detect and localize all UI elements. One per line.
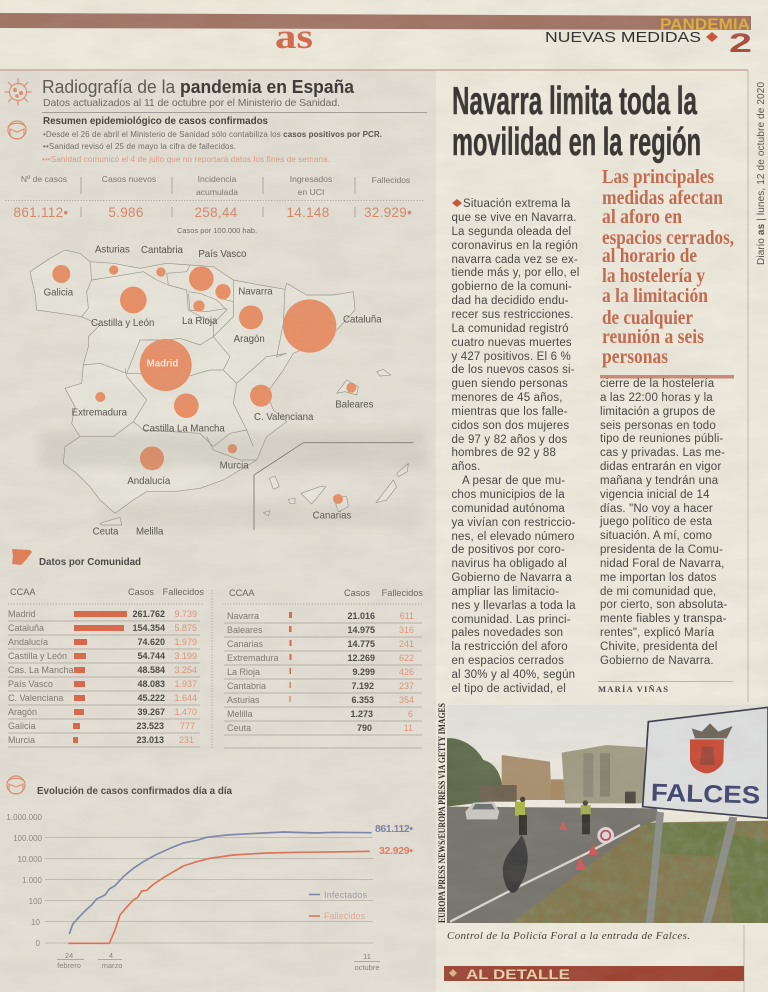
row deaths: 1.937	[174, 679, 197, 689]
heading: datos por comunidad: Datos por Comunidad	[39, 557, 141, 568]
sign text: FALCES	[651, 780, 761, 810]
row case counts: 23.013	[136, 735, 164, 745]
article column 1: y 427 positivos. El 6 %	[452, 351, 571, 363]
article column 1: tiende más y, por ello, el	[452, 267, 579, 279]
heading: evolución: Evolución de casos confirmados día a día	[37, 786, 233, 797]
ornament	[452, 199, 462, 207]
x axis dates: 24	[65, 951, 73, 960]
map: region labels: Extremadura	[72, 408, 128, 419]
row case counts: 74.620	[137, 637, 165, 647]
map of Spain	[30, 245, 413, 537]
byline: MARÍA VIÑAS	[598, 684, 668, 694]
row case counts: 48.584	[137, 665, 165, 675]
row deaths: 3.199	[174, 651, 197, 661]
row deaths: 1.979	[174, 637, 197, 647]
article column 1: menores de 45 años,	[452, 392, 563, 404]
article column 1: dad ha decidido endu-	[452, 295, 569, 307]
map: region labels: Cantabria	[141, 245, 183, 256]
row deaths: 241	[399, 639, 414, 649]
stat: ingresados en UCI: en UCI	[298, 187, 324, 197]
article column 1: que se vive en Navarra.	[452, 212, 577, 224]
stat: casos nuevos: Casos nuevos	[102, 174, 156, 184]
article column 2: cierre de la hostelería	[600, 378, 715, 390]
article column 1: años.	[452, 461, 480, 473]
map: region labels: País Vasco	[198, 249, 246, 260]
row case counts: 45.222	[137, 693, 165, 703]
subheading: deck: la hostelería y	[602, 265, 705, 287]
row names: Murcia	[8, 735, 35, 745]
row case counts: 23.523	[136, 721, 164, 731]
stat: ingresados en UCI: 14.148	[286, 205, 330, 220]
stat: incidencia acumulada: acumulada	[196, 187, 238, 197]
table: left communities	[8, 587, 212, 748]
photo road line	[450, 825, 640, 922]
row deaths: 777	[180, 721, 195, 731]
unit note: Casos por 100.000 hab.	[177, 226, 257, 235]
article column 1: nes, el elevado número	[452, 531, 575, 543]
row names: Madrid	[8, 609, 36, 619]
article column 2: limitación a grupos de	[600, 406, 715, 418]
article column 1: guen siendo personas	[452, 378, 568, 390]
row names: Melilla	[227, 709, 253, 719]
stat: nº de casos	[14, 174, 68, 220]
y axis labels: 1.000.000	[6, 813, 43, 822]
map: region labels: Aragón	[234, 334, 265, 345]
article column 1: navirus ha obligado al	[452, 558, 567, 570]
row case counts	[347, 611, 375, 733]
row deaths	[399, 611, 414, 733]
legend: Fallecidos	[324, 911, 366, 921]
stats row	[5, 174, 425, 235]
map: region labels: Navarra	[238, 286, 273, 297]
photo sky	[447, 705, 768, 740]
article column 1: el tipo de actividad, el	[452, 683, 566, 695]
photo buildings	[480, 745, 645, 803]
table: right communities	[222, 588, 423, 748]
photo shadow	[503, 835, 528, 893]
newspaper logo: as	[275, 17, 313, 56]
article column 1: comunidad autónoma	[452, 503, 565, 515]
map: Ceuta and Melilla	[100, 517, 122, 525]
line chart: cases and deaths	[6, 813, 413, 972]
sign crest	[690, 723, 733, 773]
article column 2: situación. A mí, como	[600, 530, 712, 542]
article column 2: de mi comunidad que,	[600, 586, 716, 598]
map: bubbles	[52, 265, 356, 504]
article column 1: comunidad. Las princi-	[452, 614, 571, 626]
photo road	[447, 807, 660, 924]
article column 1: gobierno de la comuni-	[452, 281, 572, 293]
diamond ornament	[706, 32, 718, 42]
map: region labels: C. Valenciana	[254, 412, 314, 423]
article column 1: mientras que los falle-	[452, 406, 568, 418]
y axis labels: 0	[36, 939, 41, 948]
row case counts: 21.016	[347, 611, 375, 621]
article column 2: días. "No voy a hacer	[600, 503, 713, 515]
map: region labels: Cataluña	[343, 315, 382, 326]
article column 2: cas y privadas. Las me-	[600, 447, 725, 459]
article column 2: didas entrarán en vigor	[600, 461, 721, 473]
row case counts: 48.083	[137, 679, 165, 689]
row names: Aragón	[8, 707, 37, 717]
photo grass verge	[507, 820, 768, 928]
photo caption: Control de la Policía Foral a la entrada de Falces.	[447, 930, 690, 942]
article column 1: de 97 y 82 años y dos	[452, 434, 567, 446]
photo sign posts	[646, 812, 737, 927]
row deaths: 1.470	[174, 707, 197, 717]
map: mainland outline and regions	[30, 250, 413, 530]
row names: C. Valenciana	[8, 693, 63, 703]
row deaths: 426	[399, 667, 414, 677]
article column 2: Gobierno de Navarra.	[600, 655, 714, 667]
article column 1: la restricción del aforo	[452, 641, 568, 653]
map: inset frame for Canarias	[254, 443, 413, 530]
row deaths: 622	[399, 653, 414, 663]
row case counts: 14.975	[347, 625, 375, 635]
stat: ingresados en UCI	[286, 174, 332, 220]
article column 1: de los nuevos casos si-	[452, 364, 575, 376]
photo cones and signal	[559, 821, 614, 870]
article column 1: La comunidad registró	[452, 323, 569, 335]
headline	[452, 80, 701, 164]
row case counts: 39.267	[137, 707, 165, 717]
y axis labels: 1.000	[22, 876, 43, 885]
article column 2: presidenta de la Comu-	[600, 544, 723, 556]
row names: Asturias	[227, 695, 260, 705]
map: region labels: Madrid	[147, 359, 178, 370]
stat: fallecidos	[364, 175, 412, 220]
map: region labels: Galicia	[44, 287, 74, 298]
stat: nº de casos: 861.112•	[14, 205, 68, 220]
article column 1: coronavirus en la región	[452, 240, 578, 252]
vertical dateline: Diario as | lunes, 12 de octubre de 2020	[756, 82, 767, 265]
row case counts: 790	[357, 723, 372, 733]
table: left communities: Fallecidos	[163, 587, 204, 597]
y axis labels: 100.000	[13, 834, 43, 843]
article column 2: a las 22:00 horas y la	[600, 392, 713, 404]
article column 1: chos municipios de la	[452, 489, 565, 501]
subheading: deck: a la limitación	[602, 285, 708, 307]
panel: radiografía infographic header	[4, 77, 427, 164]
article column 1	[452, 198, 579, 695]
note 2: ••Sanidad revisó el 25 de mayo la cifra de fallecidos.	[43, 142, 236, 151]
row deaths: 237	[399, 681, 414, 691]
row deaths: 3.254	[174, 665, 197, 675]
icon: masked face	[8, 121, 26, 139]
table: right communities: Fallecidos	[382, 588, 423, 598]
article column 2: me importan los datos	[600, 572, 717, 584]
row deaths: 1.644	[174, 693, 197, 703]
legend: Infectados	[324, 890, 368, 900]
subheading: deck: medidas afectan	[602, 187, 723, 209]
end label: infectados: 861.112•	[375, 823, 413, 835]
panel subtitle: Datos actualizados al 11 de octubre por el Ministerio de Sanidad.	[43, 97, 340, 109]
map: region labels: Murcia	[220, 461, 249, 472]
row names: Extremadura	[227, 653, 279, 663]
subheading: deck	[602, 166, 734, 368]
note 3: •••Sanidad comunicó el 4 de julio que no reportará datos los fines de semana.	[42, 155, 330, 164]
row case counts	[132, 609, 165, 745]
row names: Cataluña	[8, 623, 44, 633]
article column 1: recer sus restricciones.	[452, 309, 574, 321]
map: region labels: Asturias	[95, 245, 130, 256]
stat: ingresados en UCI: Ingresados	[290, 174, 332, 184]
article column 1: ya vivían con restriccio-	[452, 517, 576, 529]
section subtitle: NUEVAS MEDIDAS	[545, 29, 701, 46]
band: al detalle	[444, 966, 744, 982]
row case counts: 9.299	[352, 667, 375, 677]
section label: pandemia: PANDEMIA	[660, 16, 750, 34]
map: Baleares	[337, 369, 391, 395]
row names: Cantabria	[227, 681, 266, 691]
map: region labels: Castilla La Mancha	[143, 423, 225, 434]
subheading: deck: al horario de	[602, 245, 697, 267]
article column 1: La segunda oleada del	[452, 226, 571, 238]
row bars	[73, 611, 127, 743]
table: left communities: Casos	[128, 587, 154, 597]
photo police officers	[515, 797, 591, 835]
article column 2	[599, 378, 727, 667]
icon: masked face	[7, 776, 25, 794]
row deaths: 611	[400, 611, 414, 621]
stat: nº de casos: Nº de casos	[21, 174, 67, 184]
map: region labels: La Rioja	[182, 316, 218, 327]
heading: evolución	[7, 776, 233, 797]
photo: police control at Falces	[447, 703, 768, 928]
stat: fallecidos: 32.929•	[364, 205, 412, 220]
article column 2: Chivite, presidenta del	[600, 641, 717, 653]
article column 1: pales novedades son	[452, 627, 563, 639]
subheading: deck: espacios cerrados,	[602, 227, 734, 249]
panel title: Radiografía de la pandemia en España	[42, 77, 355, 97]
y axis labels: 100	[29, 897, 43, 906]
article column 2: juego político de esta	[599, 516, 713, 528]
row names	[8, 609, 74, 745]
article column 1: Gobierno de Navarra a	[452, 572, 572, 584]
article column 2: nidad Foral de Navarra,	[600, 558, 724, 570]
end label: fallecidos: 32.929•	[379, 845, 413, 857]
row case counts: 54.744	[137, 651, 165, 661]
article column 1: de positivos por coro-	[452, 544, 565, 556]
top section band	[0, 13, 751, 34]
row deaths: 231	[179, 735, 194, 745]
row names: Cas. La Mancha	[8, 665, 74, 675]
row names: Castilla y León	[8, 651, 67, 661]
row case counts: 261.762	[132, 609, 165, 619]
subheading: deck: de cualquier	[602, 307, 693, 329]
row deaths: 5.875	[174, 623, 197, 633]
row bars	[289, 612, 292, 702]
series: fallecidos	[68, 851, 370, 943]
town sign	[643, 707, 768, 818]
x axis dates: 11	[363, 952, 371, 961]
map: Canarias	[263, 463, 408, 516]
stat: incidencia acumulada	[194, 174, 238, 220]
map: region labels: Melilla	[136, 526, 164, 537]
article column 1: al 30% y al 40%, según	[452, 669, 575, 681]
row names	[227, 611, 279, 733]
article column 2: seis personas en todo	[600, 420, 716, 432]
icon: virus	[4, 78, 32, 106]
article column 1: A pesar de que mu-	[462, 475, 565, 487]
subheading: deck: reunión a seis	[602, 326, 704, 348]
stat: fallecidos: Fallecidos	[372, 175, 410, 185]
map: region labels: Andalucía	[127, 476, 171, 487]
row names: Navarra	[227, 611, 259, 621]
article column 1: cidos son dos mujeres	[452, 420, 569, 432]
article column 1: navarra cada vez se ex-	[452, 254, 578, 266]
article column 1: en espacios cerrados	[452, 655, 564, 667]
stat: incidencia acumulada: 258,44	[194, 205, 238, 220]
row names: Baleares	[227, 625, 263, 635]
stat: casos nuevos	[102, 174, 156, 220]
y axis labels: 10	[31, 918, 41, 927]
row names: Canarias	[227, 639, 264, 649]
heading: datos por comunidad	[12, 549, 141, 568]
row case counts: 6.353	[351, 695, 374, 705]
band: al detalle: AL DETALLE	[466, 966, 570, 982]
map: region labels: Canarias	[313, 511, 351, 522]
table: right communities: CCAA	[229, 588, 255, 598]
article column 2: mañana y tendrán una	[600, 475, 719, 487]
article column 1: nes y llevarlas a toda la	[452, 600, 576, 612]
article column 1: cuatro nuevas muertes	[452, 337, 572, 349]
stat: incidencia acumulada: Incidencia	[198, 174, 237, 184]
x axis dates: octubre	[354, 963, 380, 972]
row deaths: 11	[404, 723, 413, 733]
table: left communities: CCAA	[10, 587, 36, 597]
icon: Spain silhouette	[12, 549, 32, 565]
article column 1: hombres de 92 y 88	[452, 447, 556, 459]
map: region labels: Ceuta	[93, 526, 119, 537]
map: region labels: Baleares	[335, 399, 374, 410]
row deaths	[174, 609, 197, 745]
legend	[309, 890, 368, 921]
row case counts: 154.354	[132, 623, 165, 633]
x axis dates: marzo	[102, 961, 122, 970]
subheading: deck: al aforo en	[602, 206, 682, 228]
row names: Andalucía	[8, 637, 48, 647]
row deaths: 354	[399, 695, 414, 705]
series: infectados	[69, 832, 372, 934]
article column 2: tipo de reuniones públi-	[600, 433, 723, 445]
row case counts: 12.269	[347, 653, 375, 663]
map: region labels: Castilla y León	[91, 318, 154, 329]
stat: casos nuevos: 5.986	[108, 205, 144, 220]
photo car	[465, 802, 499, 819]
article column 2: mente fiables y transpa-	[600, 613, 727, 625]
page number: 2	[729, 28, 752, 58]
row names: Ceuta	[227, 723, 251, 733]
article column 1: Situación extrema la	[463, 198, 571, 210]
article column 2: vigencia inicial de 14	[600, 489, 710, 501]
summary heading: Resumen epidemiológico de casos confirmados	[43, 116, 269, 127]
row names: País Vasco	[8, 679, 53, 689]
article column 2: rentes", explicó María	[600, 627, 715, 639]
ornament	[449, 969, 457, 977]
y axis labels: 10.000	[18, 855, 43, 864]
map: region labels	[44, 245, 382, 537]
y axis labels	[6, 813, 43, 948]
row deaths: 6	[408, 709, 413, 719]
x axis dates	[57, 951, 380, 972]
row case counts: 7.192	[351, 681, 374, 691]
note 1: •Desde el 26 de abril el Ministerio de Sanidad sólo contabiliza los casos positivos por PCR.	[43, 130, 382, 139]
photo trees	[447, 738, 503, 807]
row case counts: 1.273	[350, 709, 373, 719]
photo credit: EUROPA PRESS NEWS/EUROPA PRESS VIA GETTY IMAGES	[437, 703, 447, 923]
row deaths: 316	[399, 625, 414, 635]
row case counts: 14.775	[347, 639, 375, 649]
row names: La Rioja	[227, 667, 260, 677]
subheading: deck: personas	[602, 346, 668, 368]
subheading: deck: Las principales	[602, 166, 714, 188]
article column 2: por cierto, son absoluta-	[600, 599, 727, 611]
row names: Galicia	[8, 721, 36, 731]
table: right communities: Casos	[344, 588, 370, 598]
x axis dates: 4	[109, 951, 113, 960]
article column 1: ampliar las limitacio-	[452, 586, 559, 598]
row deaths: 9.739	[174, 609, 197, 619]
x axis dates: febrero	[57, 961, 81, 970]
